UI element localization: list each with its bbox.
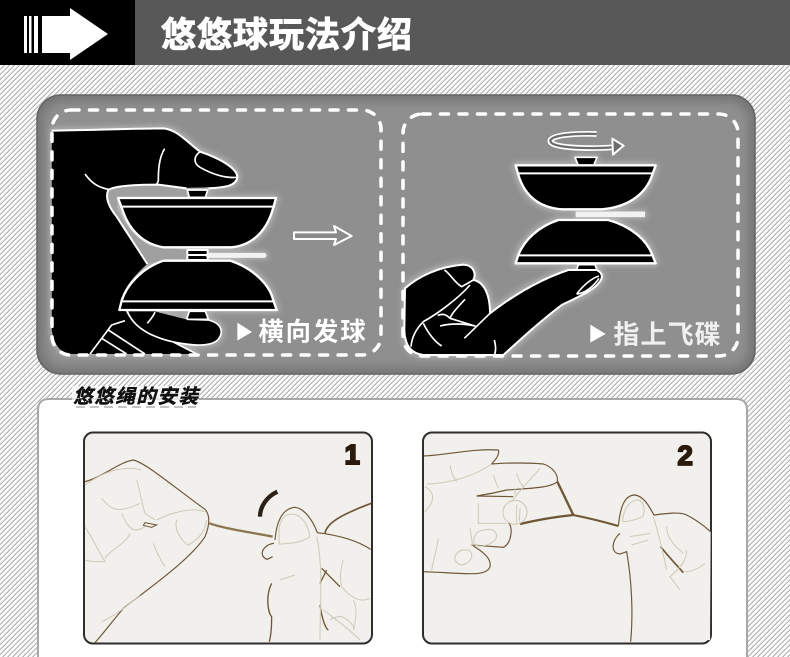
label: 指上飞碟: 指上飞碟	[613, 319, 721, 349]
heading: 悠悠绳的安装	[73, 386, 201, 408]
bottom cap	[577, 265, 597, 270]
bottom cap	[187, 311, 208, 319]
right hand	[613, 495, 711, 640]
panel: yo-yo play methods	[37, 95, 755, 374]
top disc	[118, 198, 276, 247]
panel: string installation	[38, 386, 747, 657]
lower thumb	[127, 311, 221, 345]
illustration: yo-yo on finger	[404, 157, 656, 355]
sub-panel: horizontal serve	[52, 128, 366, 354]
axle and string	[576, 206, 645, 223]
bottom disc	[516, 220, 656, 263]
left hand	[424, 450, 618, 574]
right hand	[262, 507, 321, 640]
arrow: horizontal direction	[294, 226, 352, 245]
dashed frame: left	[52, 110, 381, 355]
illustration: hand and yo-yo	[52, 128, 277, 354]
title: 悠悠球玩法介绍	[161, 16, 412, 55]
icon: striped arrow	[24, 8, 108, 60]
left hand	[85, 460, 273, 643]
sub-panel: finger-top spin	[404, 134, 721, 355]
curved arrow	[260, 492, 277, 517]
arrow: spin direction	[550, 134, 624, 155]
dashed frame: right	[403, 114, 738, 356]
step 1 card	[84, 432, 372, 644]
top cap	[575, 157, 597, 165]
step number: 2	[677, 440, 693, 471]
bottom disc	[119, 261, 277, 310]
hand	[404, 265, 602, 355]
header bar	[0, 0, 790, 65]
label: 横向发球: 横向发球	[258, 319, 366, 347]
axle and string	[187, 250, 208, 260]
step number: 1	[345, 439, 360, 470]
top cap	[187, 190, 208, 197]
step 2 card	[423, 432, 711, 644]
top disc	[516, 165, 656, 209]
